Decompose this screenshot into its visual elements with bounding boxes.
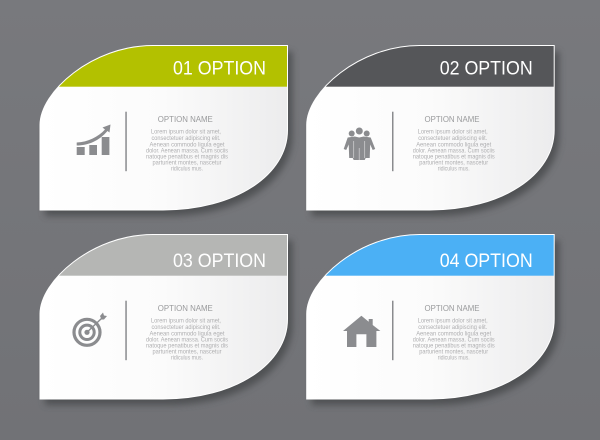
body text: consectetuer adipiscing elit. — [418, 136, 488, 142]
card body — [40, 234, 288, 399]
body text: Aenean commodo ligula eget — [416, 331, 492, 337]
icon: target with arrow — [74, 312, 107, 345]
card shadow — [312, 52, 559, 216]
body text: Lorem ipsum dolor sit amet, — [418, 319, 488, 325]
body text: consectetuer adipiscing elit. — [152, 325, 221, 331]
body text: Lorem ipsum dolor sit amet, — [418, 130, 488, 136]
heading: 04 OPTION — [440, 251, 533, 272]
body text — [146, 130, 228, 172]
body text: ridiculus mus. — [438, 356, 470, 362]
body text: ridiculus mus. — [438, 166, 470, 172]
heading: 02 OPTION — [440, 58, 533, 80]
icon: group of people — [344, 128, 375, 160]
heading: 01 OPTION — [173, 58, 266, 80]
body text: ridiculus mus. — [171, 166, 203, 172]
card body — [40, 46, 288, 210]
body text: Aenean commodo ligula eget — [416, 142, 492, 148]
body text — [413, 319, 495, 362]
heading: 03 OPTION — [173, 251, 266, 272]
body text: natoque penatibus et magnis dis — [413, 344, 495, 350]
header band — [40, 45, 288, 87]
panel: option 01 — [40, 45, 292, 216]
body text: natoque penatibus et magnis dis — [146, 155, 228, 161]
card body — [307, 234, 554, 399]
body text: dolor. Aenean massa. Cum sociis — [413, 148, 495, 154]
body text: Lorem ipsum dolor sit amet, — [151, 130, 221, 136]
body text: natoque penatibus et magnis dis — [146, 344, 228, 350]
body text — [146, 319, 228, 362]
divider — [392, 112, 394, 171]
divider — [125, 112, 127, 171]
body text: Aenean commodo ligula eget — [150, 331, 225, 337]
body text: dolor. Aenean massa. Cum sociis — [146, 337, 228, 343]
body text: dolor. Aenean massa. Cum sociis — [146, 148, 228, 154]
panel: option 04 — [307, 234, 559, 405]
body text — [413, 130, 495, 172]
header band — [307, 45, 555, 87]
body text: parturient montes, nascetur — [419, 161, 488, 167]
divider — [392, 301, 394, 360]
body text: ridiculus mus. — [171, 356, 203, 362]
icon: growth chart — [77, 124, 110, 155]
body text: Lorem ipsum dolor sit amet, — [151, 319, 221, 325]
card outline — [307, 46, 554, 210]
panel: option 02 — [307, 45, 559, 216]
divider — [125, 301, 127, 360]
body text: Aenean commodo ligula eget — [150, 142, 225, 148]
card shadow — [45, 52, 292, 216]
icon: house — [343, 316, 380, 347]
option name: OPTION NAME — [425, 114, 480, 124]
option name: OPTION NAME — [158, 303, 213, 313]
body text: dolor. Aenean massa. Cum sociis — [413, 337, 495, 343]
body text: parturient montes, nascetur — [152, 161, 222, 167]
header band — [40, 234, 288, 276]
card shadow — [45, 240, 292, 405]
body text: natoque penatibus et magnis dis — [413, 155, 495, 161]
body text: consectetuer adipiscing elit. — [152, 136, 221, 142]
card shadow — [312, 240, 559, 405]
card outline — [40, 46, 288, 210]
card outline — [40, 234, 288, 399]
card outline — [307, 234, 554, 399]
option name: OPTION NAME — [158, 114, 213, 124]
header band — [307, 234, 555, 276]
body text: parturient montes, nascetur — [152, 350, 222, 356]
option name: OPTION NAME — [425, 303, 480, 313]
body text: consectetuer adipiscing elit. — [418, 325, 488, 331]
panel: option 03 — [40, 234, 292, 405]
card body — [307, 46, 554, 210]
body text: parturient montes, nascetur — [419, 350, 488, 356]
